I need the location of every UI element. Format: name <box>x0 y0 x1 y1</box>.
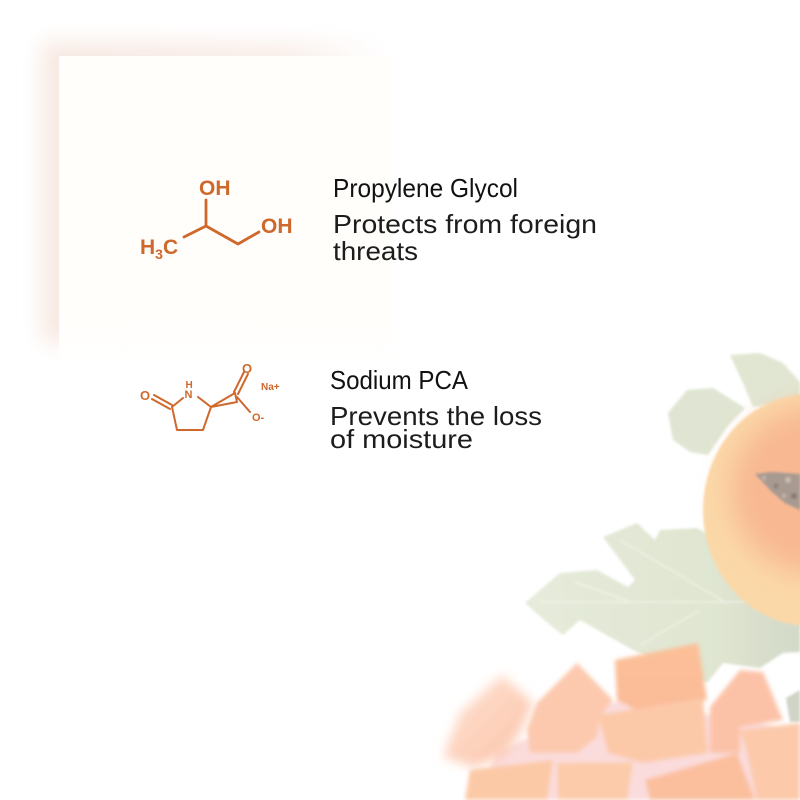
chart: propylene glycol molecule: OH <box>199 177 230 200</box>
panel: soft card with halo <box>42 42 392 366</box>
heading: Propylene Glycol: Propylene Glycol <box>333 173 518 203</box>
text block: propylene glycol benefit: threats <box>333 236 418 266</box>
chart: propylene glycol molecule: OH <box>261 215 292 238</box>
text block: sodium PCA benefit: of moisture <box>330 424 473 454</box>
chart: sodium PCA molecule: H <box>186 380 193 391</box>
chart: sodium PCA molecule: O <box>140 388 150 403</box>
chart: propylene glycol molecule <box>140 177 292 262</box>
text block: sodium PCA benefit: Prevents the loss <box>330 401 542 431</box>
illustration: papaya leaves <box>525 353 800 722</box>
chart: sodium PCA molecule: Na+ <box>261 382 280 393</box>
text block: propylene glycol benefit: Protects from foreign <box>333 209 597 239</box>
chart: sodium PCA molecule: N <box>184 389 192 401</box>
chart: sodium PCA molecule: O <box>242 361 252 376</box>
chart: sodium PCA molecule: O- <box>252 412 265 424</box>
chart: propylene glycol molecule: 3 <box>155 246 163 262</box>
illustration: papaya cubes <box>443 643 800 800</box>
heading: Sodium PCA: Sodium PCA <box>330 365 469 395</box>
chart: propylene glycol molecule: H <box>140 236 155 259</box>
chart: propylene glycol molecule: C <box>163 236 178 259</box>
chart: sodium PCA molecule <box>140 361 280 430</box>
illustration: papaya half <box>703 394 800 626</box>
